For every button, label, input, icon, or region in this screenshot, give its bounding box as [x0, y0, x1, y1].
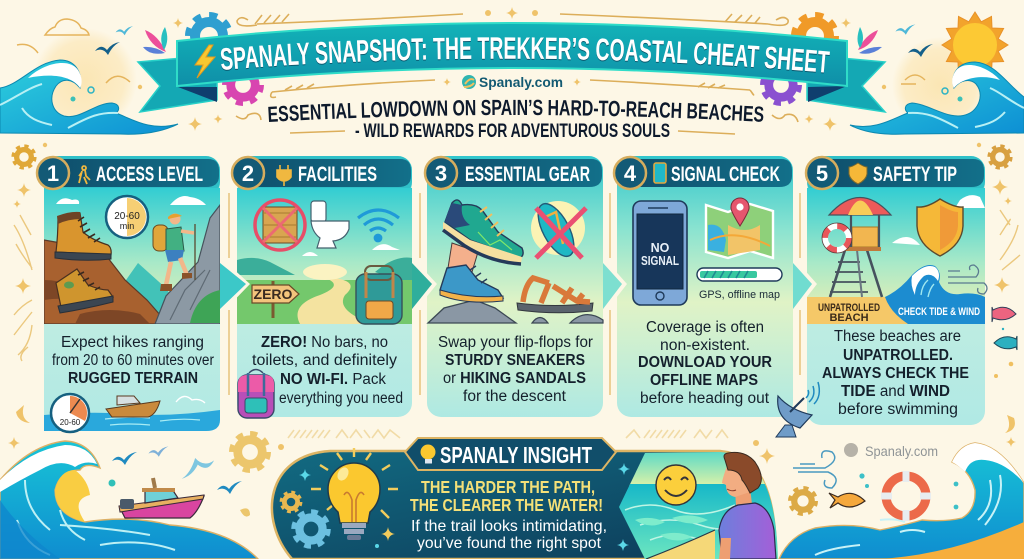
- arrows between panels: [220, 257, 817, 315]
- sandal: [517, 303, 593, 313]
- icon: satellite dish: [776, 382, 819, 437]
- zero sign: ZERO: [254, 286, 293, 302]
- boot top: [55, 212, 111, 260]
- title text: SPANALY SNAPSHOT: THE TREKKER’S COASTAL CHEAT SHEET: [220, 37, 830, 74]
- insight text: If the trail looks intimidating,: [411, 518, 607, 535]
- text: everything you need: [279, 390, 403, 407]
- insight text: THE HARDER THE PATH,: [421, 477, 595, 497]
- toilet: [311, 201, 349, 248]
- text: for the descent: [463, 388, 567, 405]
- icon: hiker: [79, 166, 90, 184]
- text: [52, 334, 214, 387]
- clock: [106, 196, 148, 238]
- fish pair: [992, 307, 1017, 378]
- boat: [106, 396, 205, 417]
- boot lower: [56, 269, 113, 313]
- icon: shield: [849, 163, 867, 184]
- person: [719, 452, 776, 559]
- header: [441, 159, 602, 187]
- gold flourishes around title: [236, 14, 798, 134]
- bulb: [299, 448, 398, 548]
- panel: signal check: 4: [624, 161, 637, 186]
- icon: boat: [119, 478, 204, 518]
- subtitle: - WILD REWARDS FOR ADVENTUROUS SOULS: [355, 121, 670, 142]
- panel: signal check: SIGNAL CHECK: [671, 163, 780, 186]
- insight text: THE CLEARER THE WATER!: [410, 495, 603, 515]
- text: toilets, and definitely: [252, 352, 397, 369]
- backpack green: [356, 266, 402, 324]
- ribbon band: [177, 23, 847, 86]
- text: or HIKING SANDALS: [443, 370, 586, 387]
- wind lines: [793, 451, 836, 488]
- text: [438, 334, 593, 405]
- header: [55, 159, 219, 187]
- ribbon tails: [138, 55, 885, 112]
- text: Coverage is often: [646, 319, 764, 336]
- text: from 20 to 60 minutes over: [52, 352, 214, 369]
- subtitle: [268, 100, 764, 142]
- panel: safety tip: [806, 156, 987, 425]
- text: UNPATROLLED.: [843, 347, 953, 364]
- icon: lightning bolt: [195, 45, 215, 78]
- illustration: shoes and flip-flop: [428, 198, 603, 323]
- illustration: phone: SIGNAL: [641, 254, 679, 268]
- text: before heading out: [640, 390, 770, 407]
- text: TIDE and WIND: [841, 383, 950, 400]
- text: NO WI-FI. Pack: [280, 371, 386, 388]
- icon: plug: [277, 165, 291, 186]
- panel: signal check: [614, 156, 793, 417]
- shield: [917, 199, 963, 256]
- header: [630, 159, 792, 187]
- map with pin: [706, 198, 773, 258]
- gear: [790, 488, 816, 514]
- gauge: 20-60: [60, 418, 81, 427]
- panel: facilities: 2: [242, 161, 254, 186]
- text: [822, 328, 969, 418]
- panel: access level: 1: [47, 161, 59, 186]
- text: non-existent.: [660, 337, 750, 354]
- hiker: [153, 214, 195, 291]
- text: Swap your flip-flops for: [438, 334, 593, 351]
- leg: [448, 243, 478, 272]
- illustration: phone: NO: [651, 241, 670, 255]
- text: ALWAYS CHECK THE: [822, 365, 969, 382]
- panel: facilities: [232, 156, 412, 418]
- watermark: Spanaly.com: Spanaly.com: [865, 443, 938, 459]
- fish: [829, 493, 865, 508]
- panel: safety tip: 5: [816, 161, 828, 186]
- illustration: no hut, toilet, wifi, landscape: [237, 188, 412, 324]
- panel: safety tip: SAFETY TIP: [873, 163, 957, 186]
- illustration: hiker and boots: [44, 188, 220, 324]
- backpack purple: [238, 370, 274, 418]
- gauge: [51, 394, 89, 432]
- labels: [818, 302, 980, 324]
- card dividers: [229, 193, 800, 395]
- icon: phone: [654, 163, 666, 183]
- wind lines: [948, 265, 987, 294]
- panel: essential gear: 3: [435, 161, 447, 186]
- text: DOWNLOAD YOUR: [638, 354, 772, 371]
- title ribbon: [136, 22, 887, 113]
- side gears and streaks: [14, 146, 1020, 433]
- illustration: lifeguard tower, shield, wave: [807, 188, 985, 324]
- clock: min: [120, 221, 134, 231]
- top right corner: sun and wave: [850, 12, 1024, 134]
- labels: CHECK TIDE & WIND: [898, 306, 980, 318]
- text: ZERO! No bars, no: [261, 334, 388, 351]
- header: [248, 159, 411, 187]
- caption: GPS, offline map: [699, 289, 780, 301]
- rocks: [428, 300, 516, 323]
- text: RUGGED TERRAIN: [68, 370, 198, 387]
- panel: facilities: FACILITIES: [298, 163, 377, 186]
- clock: 20-60: [114, 211, 140, 222]
- progress bar: [697, 268, 782, 281]
- panel: access level: ACCESS LEVEL: [96, 163, 203, 186]
- ring: [822, 223, 852, 253]
- zero sign: [252, 281, 299, 318]
- beach scene: [619, 452, 778, 559]
- logo: Spanaly.com: Spanaly.com: [479, 74, 563, 90]
- bottom left: wave, sun, boat and birds: [0, 434, 268, 559]
- insight heading tab: SPANALY INSIGHT: [440, 442, 592, 468]
- zigzag decoration above insight: [288, 430, 728, 438]
- insight text: [410, 477, 607, 552]
- text: [252, 334, 403, 407]
- bottom right: wave, life ring, fish, wind: [779, 443, 1024, 559]
- lower sneaker: [440, 265, 503, 300]
- panel: essential gear: [425, 156, 603, 417]
- gears: [282, 492, 328, 546]
- text: before swimming: [838, 401, 958, 418]
- header gears and splashes: [143, 16, 882, 102]
- water strip with boat: [44, 410, 220, 431]
- top left corner: wave and birds: [0, 19, 178, 134]
- insight heading tab: [405, 438, 616, 470]
- subtitle: ESSENTIAL LOWDOWN ON SPAIN’S HARD-TO-REACH BEACHES: [268, 100, 764, 122]
- illustration: phone: [633, 201, 687, 305]
- life ring: [886, 476, 926, 516]
- upper sneaker: [445, 200, 523, 258]
- no-entry hut: [255, 200, 305, 250]
- panel: access level: [37, 156, 220, 432]
- panel: essential gear: ESSENTIAL GEAR: [465, 163, 590, 186]
- labels: BEACH: [829, 312, 869, 324]
- text: OFFLINE MAPS: [650, 372, 758, 389]
- header: [822, 159, 984, 187]
- panel: spanaly insight: [272, 438, 785, 559]
- smiley: [656, 465, 696, 505]
- text: [638, 319, 772, 407]
- text: Expect hikes ranging: [61, 334, 204, 351]
- text: These beaches are: [834, 328, 961, 345]
- icon: wifi: [358, 210, 399, 241]
- text: STURDY SNEAKERS: [445, 352, 585, 369]
- insight text: you’ve found the right spot: [417, 535, 602, 552]
- labels: UNPATROLLED: [818, 302, 880, 314]
